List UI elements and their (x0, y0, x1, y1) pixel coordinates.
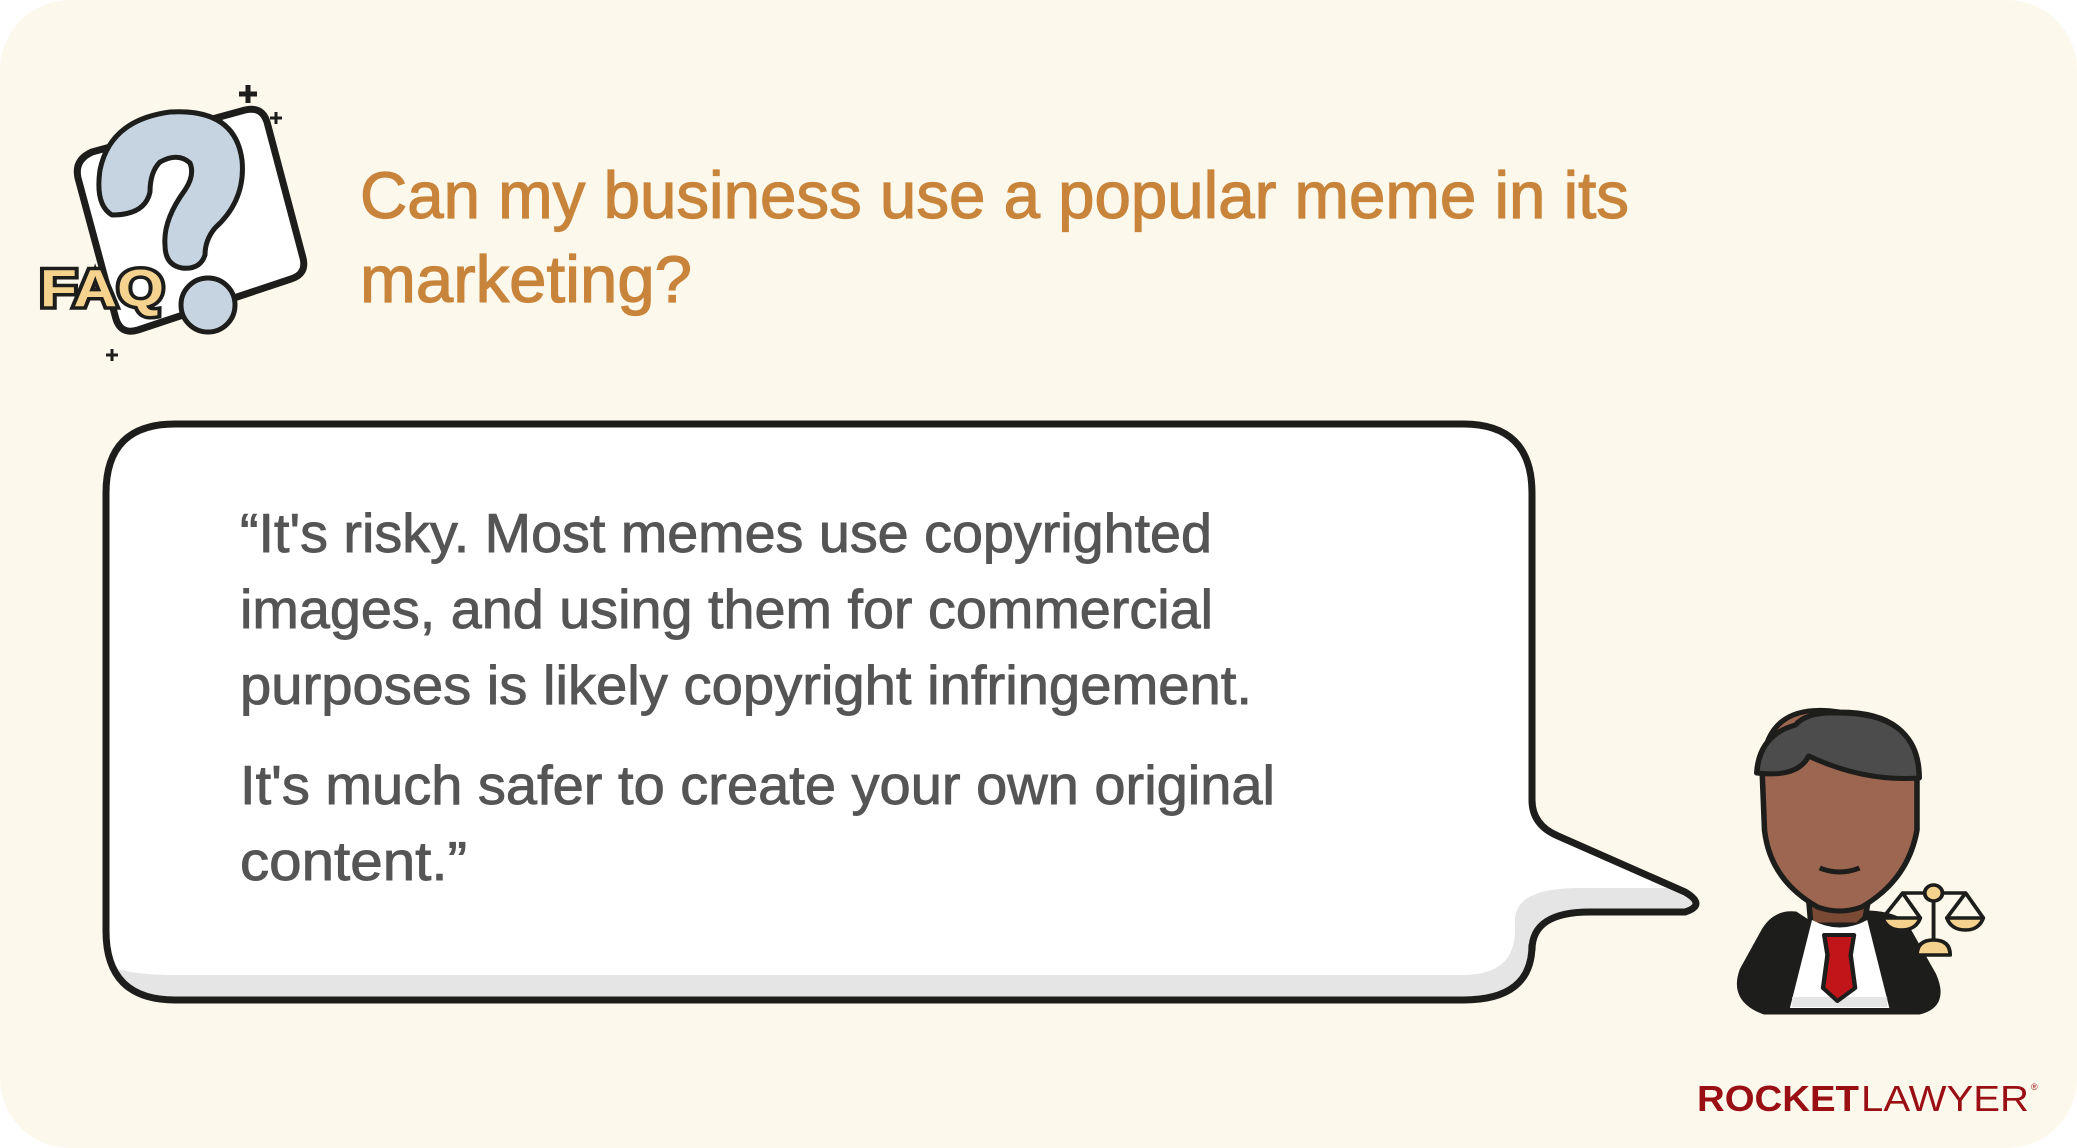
title: marketing? (360, 242, 692, 316)
logo: Rocket Lawyer: ROCKET (1697, 1078, 1859, 1119)
logo: Rocket Lawyer: ® (2031, 1082, 2038, 1092)
quote text: images, and using them for commercial (240, 578, 1213, 640)
quote text: It's much safer to create your own original (240, 754, 1275, 816)
icon: FAQ question card (40, 85, 304, 361)
speech bubble (100, 424, 1710, 1010)
title (360, 158, 1629, 316)
icon: scales (1883, 885, 1983, 955)
logo: Rocket Lawyer (1697, 1078, 2038, 1119)
title: Can my business use a popular meme in its (360, 158, 1629, 232)
FAQ label: FAQ (40, 260, 164, 318)
icon: lawyer (1740, 710, 1983, 1012)
quote text: “It's risky. Most memes use copyrighted (240, 502, 1212, 564)
logo: Rocket Lawyer: LAWYER (1861, 1078, 2029, 1119)
quote text: purposes is likely copyright infringement. (240, 654, 1252, 716)
quote text: content.” (240, 830, 467, 892)
quote text (240, 502, 1275, 892)
